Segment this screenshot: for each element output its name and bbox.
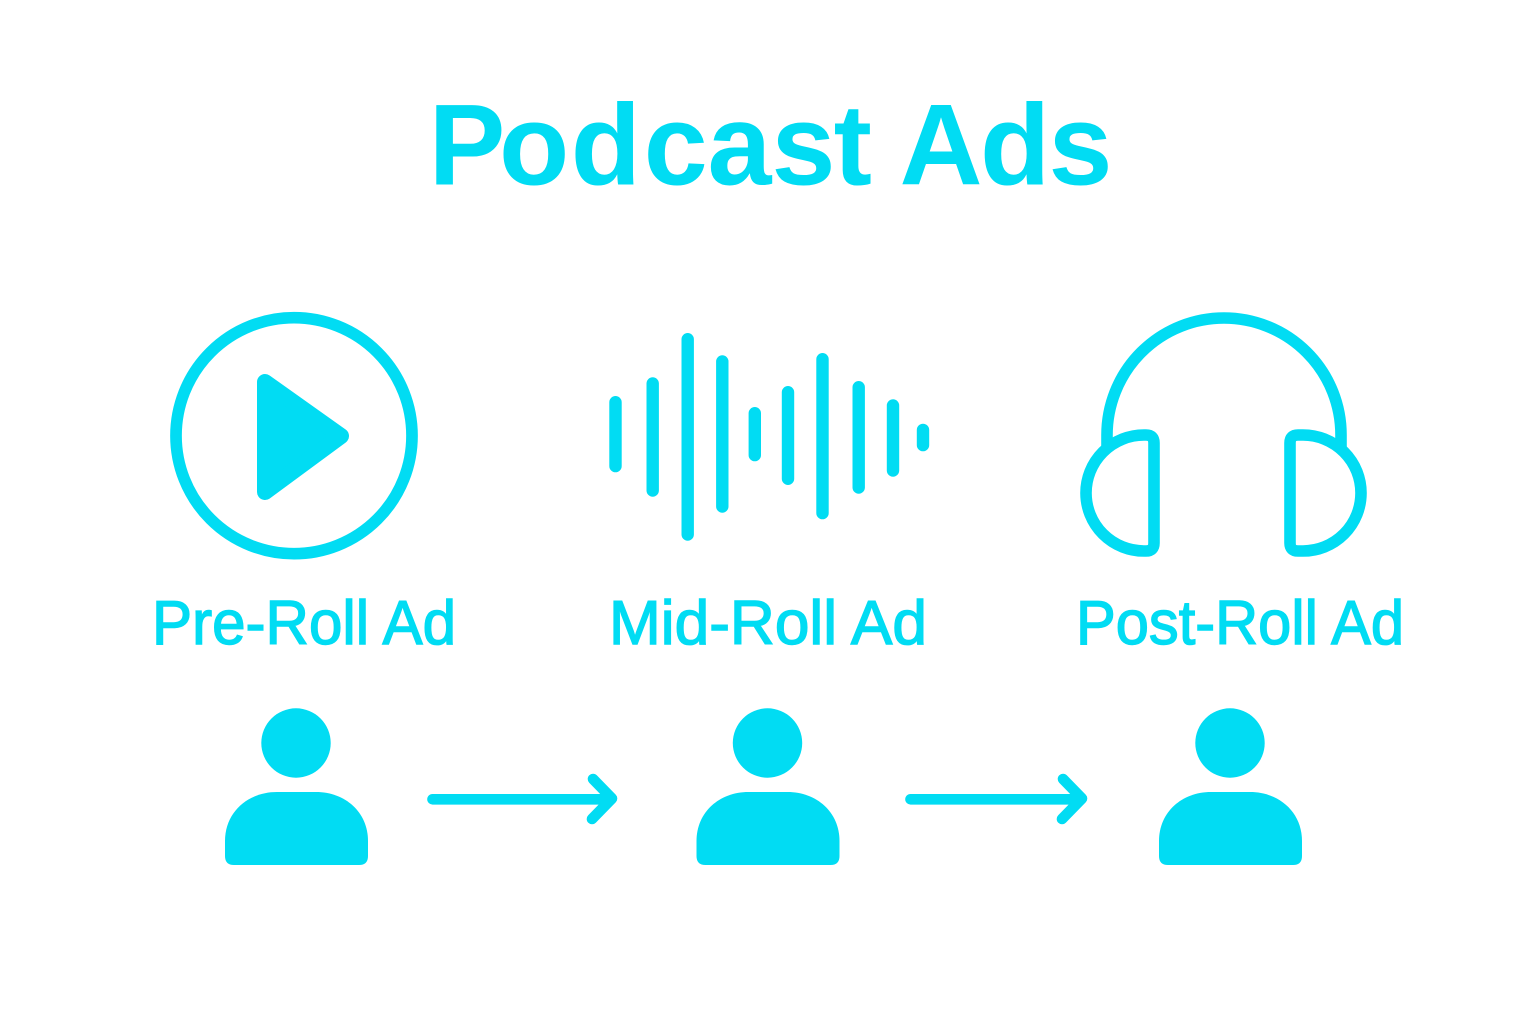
icon: person 3 bbox=[1159, 708, 1302, 865]
arrow 2 bbox=[910, 779, 1082, 819]
arrow 1 bbox=[432, 779, 612, 819]
icon: sound wave bbox=[616, 339, 923, 534]
title: Podcast Ads bbox=[429, 82, 1112, 210]
label: pre-roll: Pre-Roll Ad bbox=[152, 589, 456, 658]
icon: play button bbox=[176, 318, 412, 554]
icon: headphones bbox=[1086, 318, 1361, 551]
label: post-roll: Post-Roll Ad bbox=[1076, 589, 1404, 658]
icon: person 2 bbox=[696, 708, 840, 865]
label: mid-roll: Mid-Roll Ad bbox=[609, 589, 927, 658]
icon: person 1 bbox=[225, 708, 368, 865]
